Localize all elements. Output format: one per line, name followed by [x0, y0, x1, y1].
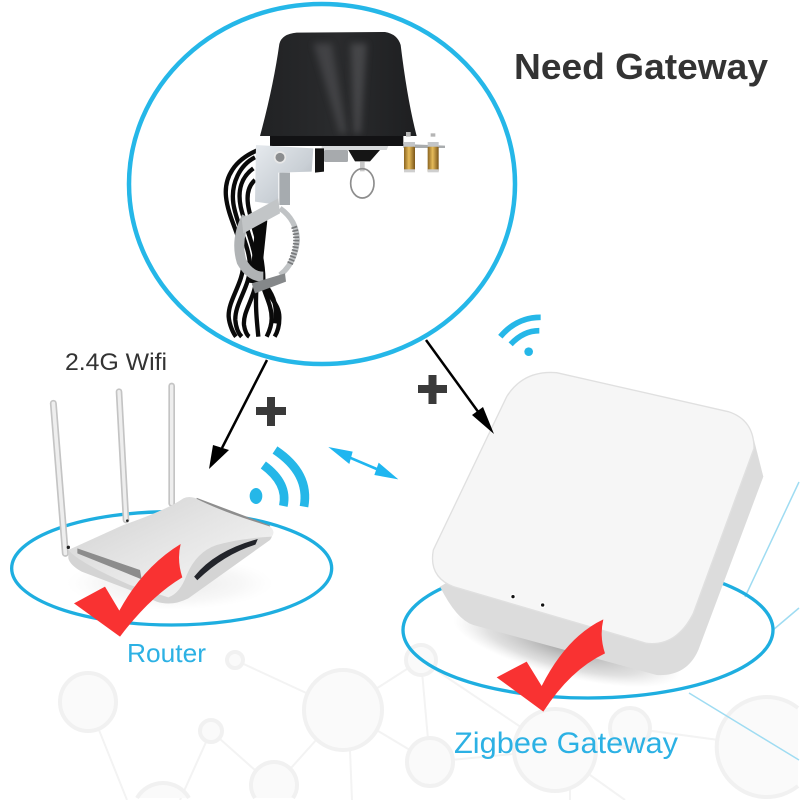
light blue network lines	[689, 482, 799, 760]
panel: top wifi icon	[500, 317, 541, 356]
label: 2.4G Wifi: 2.4G Wifi	[65, 349, 167, 376]
icon: motorised valve	[226, 32, 445, 337]
panel: gateway	[403, 372, 773, 712]
arrow: valve to router	[209, 360, 267, 469]
icon: red check mark	[497, 619, 605, 712]
plus sign: router	[256, 397, 286, 426]
panel: valve circle	[129, 4, 515, 364]
plus sign: gateway	[418, 375, 447, 404]
gateway shadow	[446, 589, 687, 704]
arrow: valve to gateway	[426, 340, 494, 434]
arrow: double headed link	[328, 447, 398, 479]
heading: Need Gateway: Need Gateway	[514, 46, 768, 87]
icon: router device	[53, 386, 273, 610]
valve circle outline	[129, 4, 515, 364]
background network pattern	[60, 645, 798, 800]
label: Router: Router	[127, 638, 206, 668]
label: Zigbee Gateway: Zigbee Gateway	[454, 727, 678, 760]
icon: wifi signal	[250, 450, 305, 507]
gateway base ring	[403, 562, 773, 698]
icon: red check mark	[74, 544, 182, 637]
icon: gateway device	[432, 372, 763, 675]
panel: router	[12, 386, 332, 637]
router base ring	[12, 512, 332, 625]
